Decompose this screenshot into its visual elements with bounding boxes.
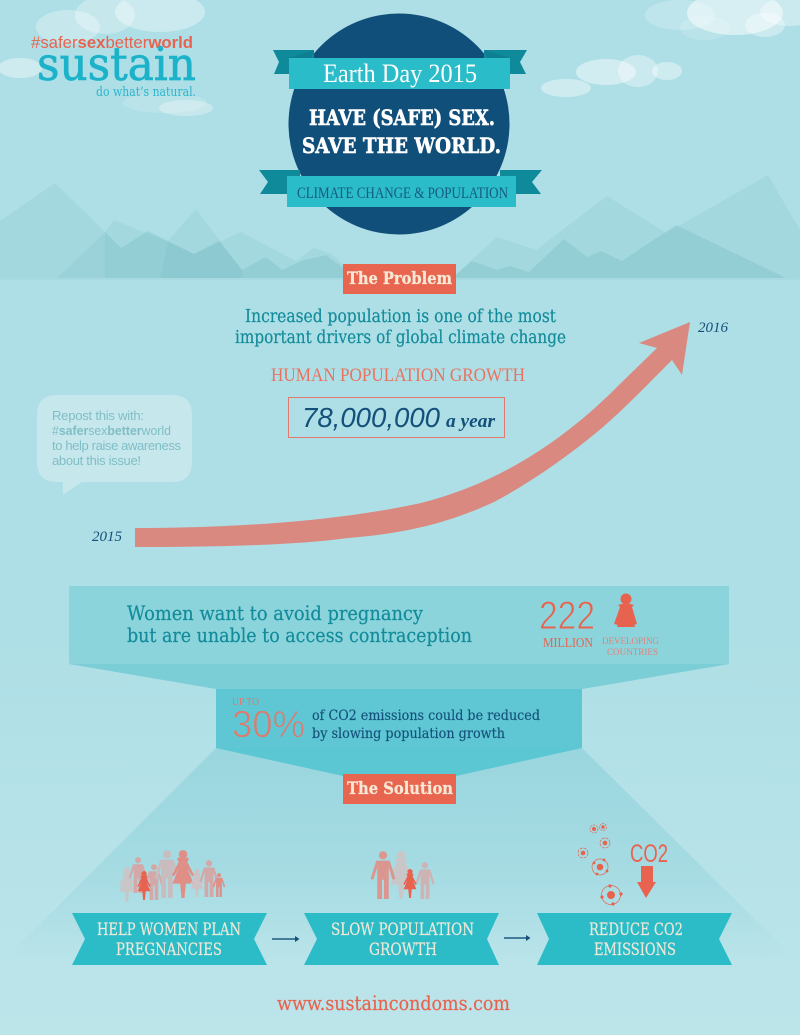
ribbon: bottom: CLIMATE CHANGE & POPULATION [297, 185, 508, 202]
speech bubble: #safersexbetterworld [52, 423, 171, 438]
label: human population growth: HUMAN POPULATION GROWTH [271, 366, 525, 386]
label: co2 with down arrow: CO2 [630, 840, 668, 868]
stat: 222 million [539, 594, 595, 651]
panel text [127, 601, 472, 647]
speech bubble [37, 395, 192, 495]
headline: HAVE (SAFE) SEX. [309, 105, 495, 130]
panel text [312, 708, 540, 742]
stat: 222 million: 222 [539, 594, 595, 638]
panel text: of CO2 emissions could be reduced [312, 708, 540, 724]
year label: 2015: 2015 [92, 529, 122, 545]
ground line [0, 278, 800, 280]
ribbon: top: Earth Day 2015 [323, 59, 477, 88]
banner: reduce co2 emissions: REDUCE CO2 [589, 920, 683, 939]
banner: help women plan pregnancies [72, 913, 267, 965]
year label: 2016: 2016 [698, 320, 728, 336]
problem statement: important drivers of global climate change [235, 328, 566, 348]
website url: www.sustaincondoms.com [277, 991, 510, 1015]
arrow: step 2 to 3 [504, 935, 530, 941]
label: co2 with down arrow [630, 840, 668, 898]
heading: the problem [343, 264, 456, 294]
mountains [0, 175, 800, 278]
panel text: but are unable to access contraception [127, 623, 472, 647]
banner: reduce co2 emissions [537, 913, 732, 965]
icon: large family [119, 850, 225, 902]
logo: sustain [37, 37, 196, 91]
banner: slow population growth: GROWTH [369, 940, 437, 959]
heading: the solution [343, 774, 456, 804]
icon: woman [614, 594, 637, 627]
headline: SAVE THE WORLD. [302, 133, 501, 158]
banner: help women plan pregnancies: PREGNANCIES [116, 940, 222, 959]
badge circle [288, 14, 510, 234]
problem statement [235, 307, 566, 348]
speech bubble: about this issue! [52, 453, 141, 468]
speech bubble: Repost this with: [52, 408, 144, 423]
heading: the problem: The Problem [347, 269, 452, 289]
icon: co2 molecules [578, 824, 623, 906]
beam under funnel [0, 748, 800, 1000]
stat: 30%: 30% [232, 704, 305, 746]
ribbon: top [273, 50, 527, 89]
label: developing countries: COUNTRIES [607, 648, 658, 658]
panel text: Women want to avoid pregnancy [127, 601, 424, 625]
icon: small family [371, 851, 435, 899]
arrow: step 1 to 2 [272, 936, 300, 942]
banner: reduce co2 emissions: EMISSIONS [594, 940, 676, 959]
headline [302, 105, 501, 158]
logo: do what’s natural. [96, 85, 196, 100]
problem statement: Increased population is one of the most [245, 307, 556, 327]
logo: #safersexbetterworld [31, 33, 193, 52]
banner: slow population growth: SLOW POPULATION [331, 920, 474, 939]
badge [259, 14, 542, 234]
stat box: 78,000,000 a year: a year [446, 411, 496, 432]
stat: 222 million: MILLION [543, 636, 593, 651]
panel text: by slowing population growth [312, 726, 505, 742]
stat box: 78,000,000 a year [288, 398, 504, 438]
growth arrow [135, 322, 690, 547]
panel: 30% co2 [216, 689, 582, 776]
clouds [0, 0, 800, 116]
heading: the solution: The Solution [347, 779, 453, 799]
stat box: 78,000,000 a year: 78,000,000 [302, 402, 440, 433]
stat: 30%: UP TO [232, 697, 259, 708]
label: developing countries: DEVELOPING [602, 637, 659, 647]
speech bubble: to help raise awareness [52, 438, 182, 453]
panel: women unable to access contraception [69, 586, 729, 689]
banner: help women plan pregnancies: HELP WOMEN PLAN [97, 920, 241, 939]
label: developing countries [602, 637, 659, 658]
banner: slow population growth [304, 913, 499, 965]
ribbon: bottom [259, 170, 542, 207]
